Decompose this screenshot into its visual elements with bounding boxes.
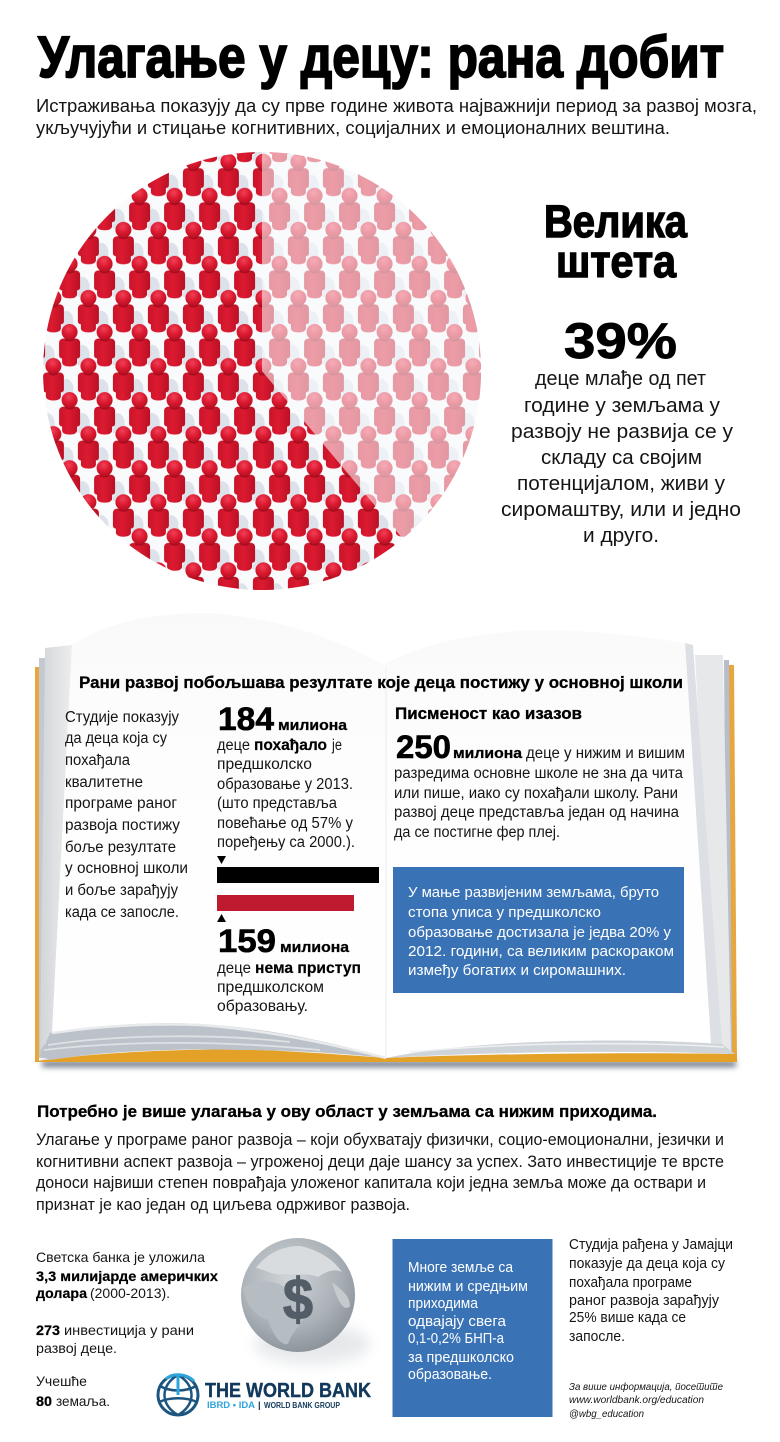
bar comparison: 184 vs 159 million xyxy=(217,856,379,922)
investment paragraph: признат је као један од циљева одрживог развоја. xyxy=(36,1196,410,1214)
literacy text xyxy=(394,729,685,841)
callout: gross enrolment: образовање достизала је једва 20% у xyxy=(408,924,671,941)
statistic: 184 million attended: образовање у 2013. xyxy=(217,776,353,793)
literacy text: разредима основне школе не зна да чита xyxy=(394,765,683,782)
open book illustration xyxy=(35,613,737,1067)
statistic description: деце млађе од пет xyxy=(535,367,707,390)
more information links: www.worldbank.org/education xyxy=(569,1394,704,1406)
statistic: 159 million no access: нема приступ xyxy=(255,960,361,977)
statistic: 159 million no access: образовању. xyxy=(217,998,308,1015)
statistic: 159 million no access: деце xyxy=(217,960,251,977)
literacy text: или пише, иако су похађали школу. Рани xyxy=(394,785,678,802)
text block: World Bank investment: развој деце. xyxy=(36,1340,117,1356)
literacy text: да се постигне фер плеј. xyxy=(394,824,560,841)
callout: GDP share xyxy=(392,1239,552,1417)
text block: World Bank investment: 3,3 милијарде америчких xyxy=(36,1268,218,1284)
statistic: 184 million attended xyxy=(217,701,355,851)
icon: globe with dollar sign: $ xyxy=(283,1267,313,1332)
text block: studies: квалитетне xyxy=(65,774,143,791)
investment paragraph xyxy=(36,1131,724,1214)
intro text: укључујући и стицање когнитивних, социјалних и емоционалних вештина. xyxy=(36,118,670,138)
statistic: 184 million attended: 184 xyxy=(218,701,274,737)
statistic: 184 million attended: повећање од 57% у xyxy=(217,815,353,832)
callout: gross enrolment: У мање развијеним земљама, бруто xyxy=(408,884,659,901)
literacy text: развој деце представља један од начина xyxy=(394,804,679,821)
callout: GDP share: приходима xyxy=(408,1296,479,1312)
statistic: 184 million attended: милиона xyxy=(278,718,348,734)
statistic: 184 million attended: деце xyxy=(217,737,250,754)
statistic: 159 million no access xyxy=(217,923,361,1015)
icon: World Bank emblem xyxy=(158,1375,198,1415)
text block: studies: Студије показују xyxy=(65,709,179,726)
text block: Jamaica study: Студија рађена у Јамајци xyxy=(569,1237,733,1253)
text block: World Bank investment: (2000-2013). xyxy=(90,1285,170,1301)
callout: GDP share: нижим и средњим xyxy=(408,1279,528,1295)
investment paragraph: доноси највиши степен поврађаја уложеног капитала који једна земља може да оствари и xyxy=(36,1174,706,1192)
logo tagline xyxy=(207,1400,341,1411)
statistic description: и друго. xyxy=(583,524,659,547)
text block: World Bank investment xyxy=(36,1249,218,1409)
text block: World Bank investment: долара xyxy=(36,1285,87,1301)
callout: gross enrolment xyxy=(393,867,684,993)
investment paragraph: Улагање у програме раног развоја – који обухватају физички, социо-емоционални, језички и xyxy=(36,1131,724,1149)
text block: Jamaica study: показује да деца која су xyxy=(569,1256,726,1272)
section heading: more investment: Потребно је више улагања у ову област у земљама са нижим приходима. xyxy=(37,1102,657,1121)
callout: GDP share: Многе земље са xyxy=(408,1260,514,1276)
statistic description: потенцијалом, живи у xyxy=(517,472,726,495)
callout: GDP share: одвајају свега xyxy=(408,1314,507,1330)
more information links: За више информација, посетите xyxy=(569,1381,723,1393)
logo: The World Bank xyxy=(158,1375,371,1415)
intro text xyxy=(36,96,757,138)
text block: studies: у основној школи xyxy=(65,860,188,877)
text block: Jamaica study: похађала програме xyxy=(569,1275,692,1291)
text block: studies: похађала xyxy=(65,752,130,769)
intro text: Истраживања показују да су прве године живота најважнији период за развој мозга, xyxy=(36,96,757,116)
logo tagline: IBRD • IDA xyxy=(207,1400,255,1411)
text block: studies: боље резултате xyxy=(65,839,176,856)
more information links xyxy=(569,1381,723,1420)
logo wordmark: THE WORLD BANK xyxy=(205,1380,371,1402)
more information links: @wbg_education xyxy=(569,1408,644,1420)
statistic description: сиромаштву, или и једно xyxy=(501,498,741,521)
statistic: 184 million attended: (што представља xyxy=(217,795,337,812)
heading: great damage: Велика xyxy=(544,196,688,247)
callout: GDP share: образовање. xyxy=(408,1367,492,1383)
callout: GDP share: за предшколско xyxy=(408,1350,514,1366)
statistic description: године у земљама у xyxy=(524,394,721,417)
text block: Jamaica study: запосле. xyxy=(569,1329,625,1345)
text block: World Bank investment: 273 xyxy=(36,1322,60,1338)
panel: big damage statistic xyxy=(501,196,741,547)
literacy heading: Писменост као изазов xyxy=(395,705,582,723)
text block: studies: и боље зарађују xyxy=(65,882,178,899)
statistic: 159 million no access: 159 xyxy=(218,923,276,959)
text block: studies: да деца која су xyxy=(65,730,167,747)
pie chart of children figures: 61% dark, 39% pale xyxy=(43,152,481,590)
text block: World Bank investment: земаља. xyxy=(56,1393,110,1409)
callout: GDP share: 0,1-0,2% БНП-а xyxy=(408,1331,505,1347)
statistic description xyxy=(501,367,741,547)
statistic: 39%: 39% xyxy=(564,313,677,369)
text block: studies: када се запосле. xyxy=(65,904,179,921)
text block: studies xyxy=(65,709,188,921)
icon: globe with dollar sign xyxy=(241,1238,370,1364)
literacy text: милиона xyxy=(453,746,523,762)
text block: Jamaica study: 25% више када се xyxy=(569,1310,686,1326)
literacy text: деце у нижим и вишим xyxy=(526,745,685,762)
logo tagline: | xyxy=(258,1400,261,1411)
statistic description: складу са својим xyxy=(541,446,702,469)
callout: gross enrolment: стопа уписа у предшколско xyxy=(408,904,601,921)
book heading: Рани развој побољшава резултате које деца постижу у основној школи xyxy=(79,673,683,692)
statistic: 159 million no access: предшколском xyxy=(217,979,324,996)
text block: Jamaica study xyxy=(569,1237,733,1345)
heading: great damage: штета xyxy=(556,236,677,287)
statistic description: развоју не развија се у xyxy=(511,420,734,443)
text block: World Bank investment: инвестиција у рани xyxy=(64,1322,194,1338)
text block: World Bank investment: 80 xyxy=(36,1393,52,1409)
literacy text: 250 xyxy=(396,729,451,765)
statistic: 159 million no access: милиона xyxy=(280,940,350,956)
callout: gross enrolment: између богатих и сиромашних. xyxy=(408,962,626,979)
text block: studies: развоја постижу xyxy=(65,817,180,834)
statistic: 184 million attended: предшколско xyxy=(217,756,312,773)
statistic: 184 million attended: је xyxy=(331,737,342,754)
investment paragraph: когнитивни аспект развоја – угроженој деци даје шансу за успех. Зато инвестиције те врсте xyxy=(36,1153,724,1171)
heading: great damage xyxy=(544,196,688,287)
logo tagline: WORLD BANK GROUP xyxy=(264,1401,341,1410)
statistic: 184 million attended: похађало xyxy=(254,737,327,754)
text block: World Bank investment: Учешће xyxy=(36,1373,87,1389)
text block: Jamaica study: раног развоја зарађују xyxy=(569,1293,720,1309)
callout: gross enrolment: 2012. години, са великим раскораком xyxy=(408,943,674,960)
text block: World Bank investment: Светска банка је уложила xyxy=(36,1249,205,1265)
statistic: 184 million attended: поређењу са 2000.). xyxy=(217,834,355,851)
text block: studies: програме раног xyxy=(65,795,177,812)
